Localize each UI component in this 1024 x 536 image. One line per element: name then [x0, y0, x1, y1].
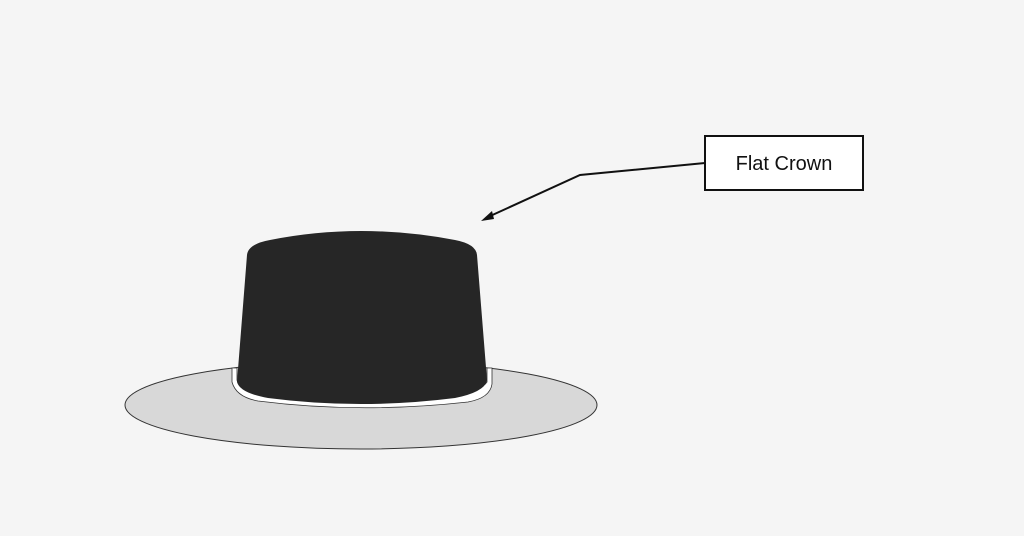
callout: Flat Crown: [705, 136, 863, 190]
hat illustration: [125, 231, 597, 449]
hat crown: [237, 231, 487, 404]
hat brim: [125, 361, 597, 449]
callout: Flat Crown: Flat Crown: [736, 153, 832, 175]
arrow: pointer to crown: [481, 163, 705, 221]
white hatband: [232, 368, 492, 408]
